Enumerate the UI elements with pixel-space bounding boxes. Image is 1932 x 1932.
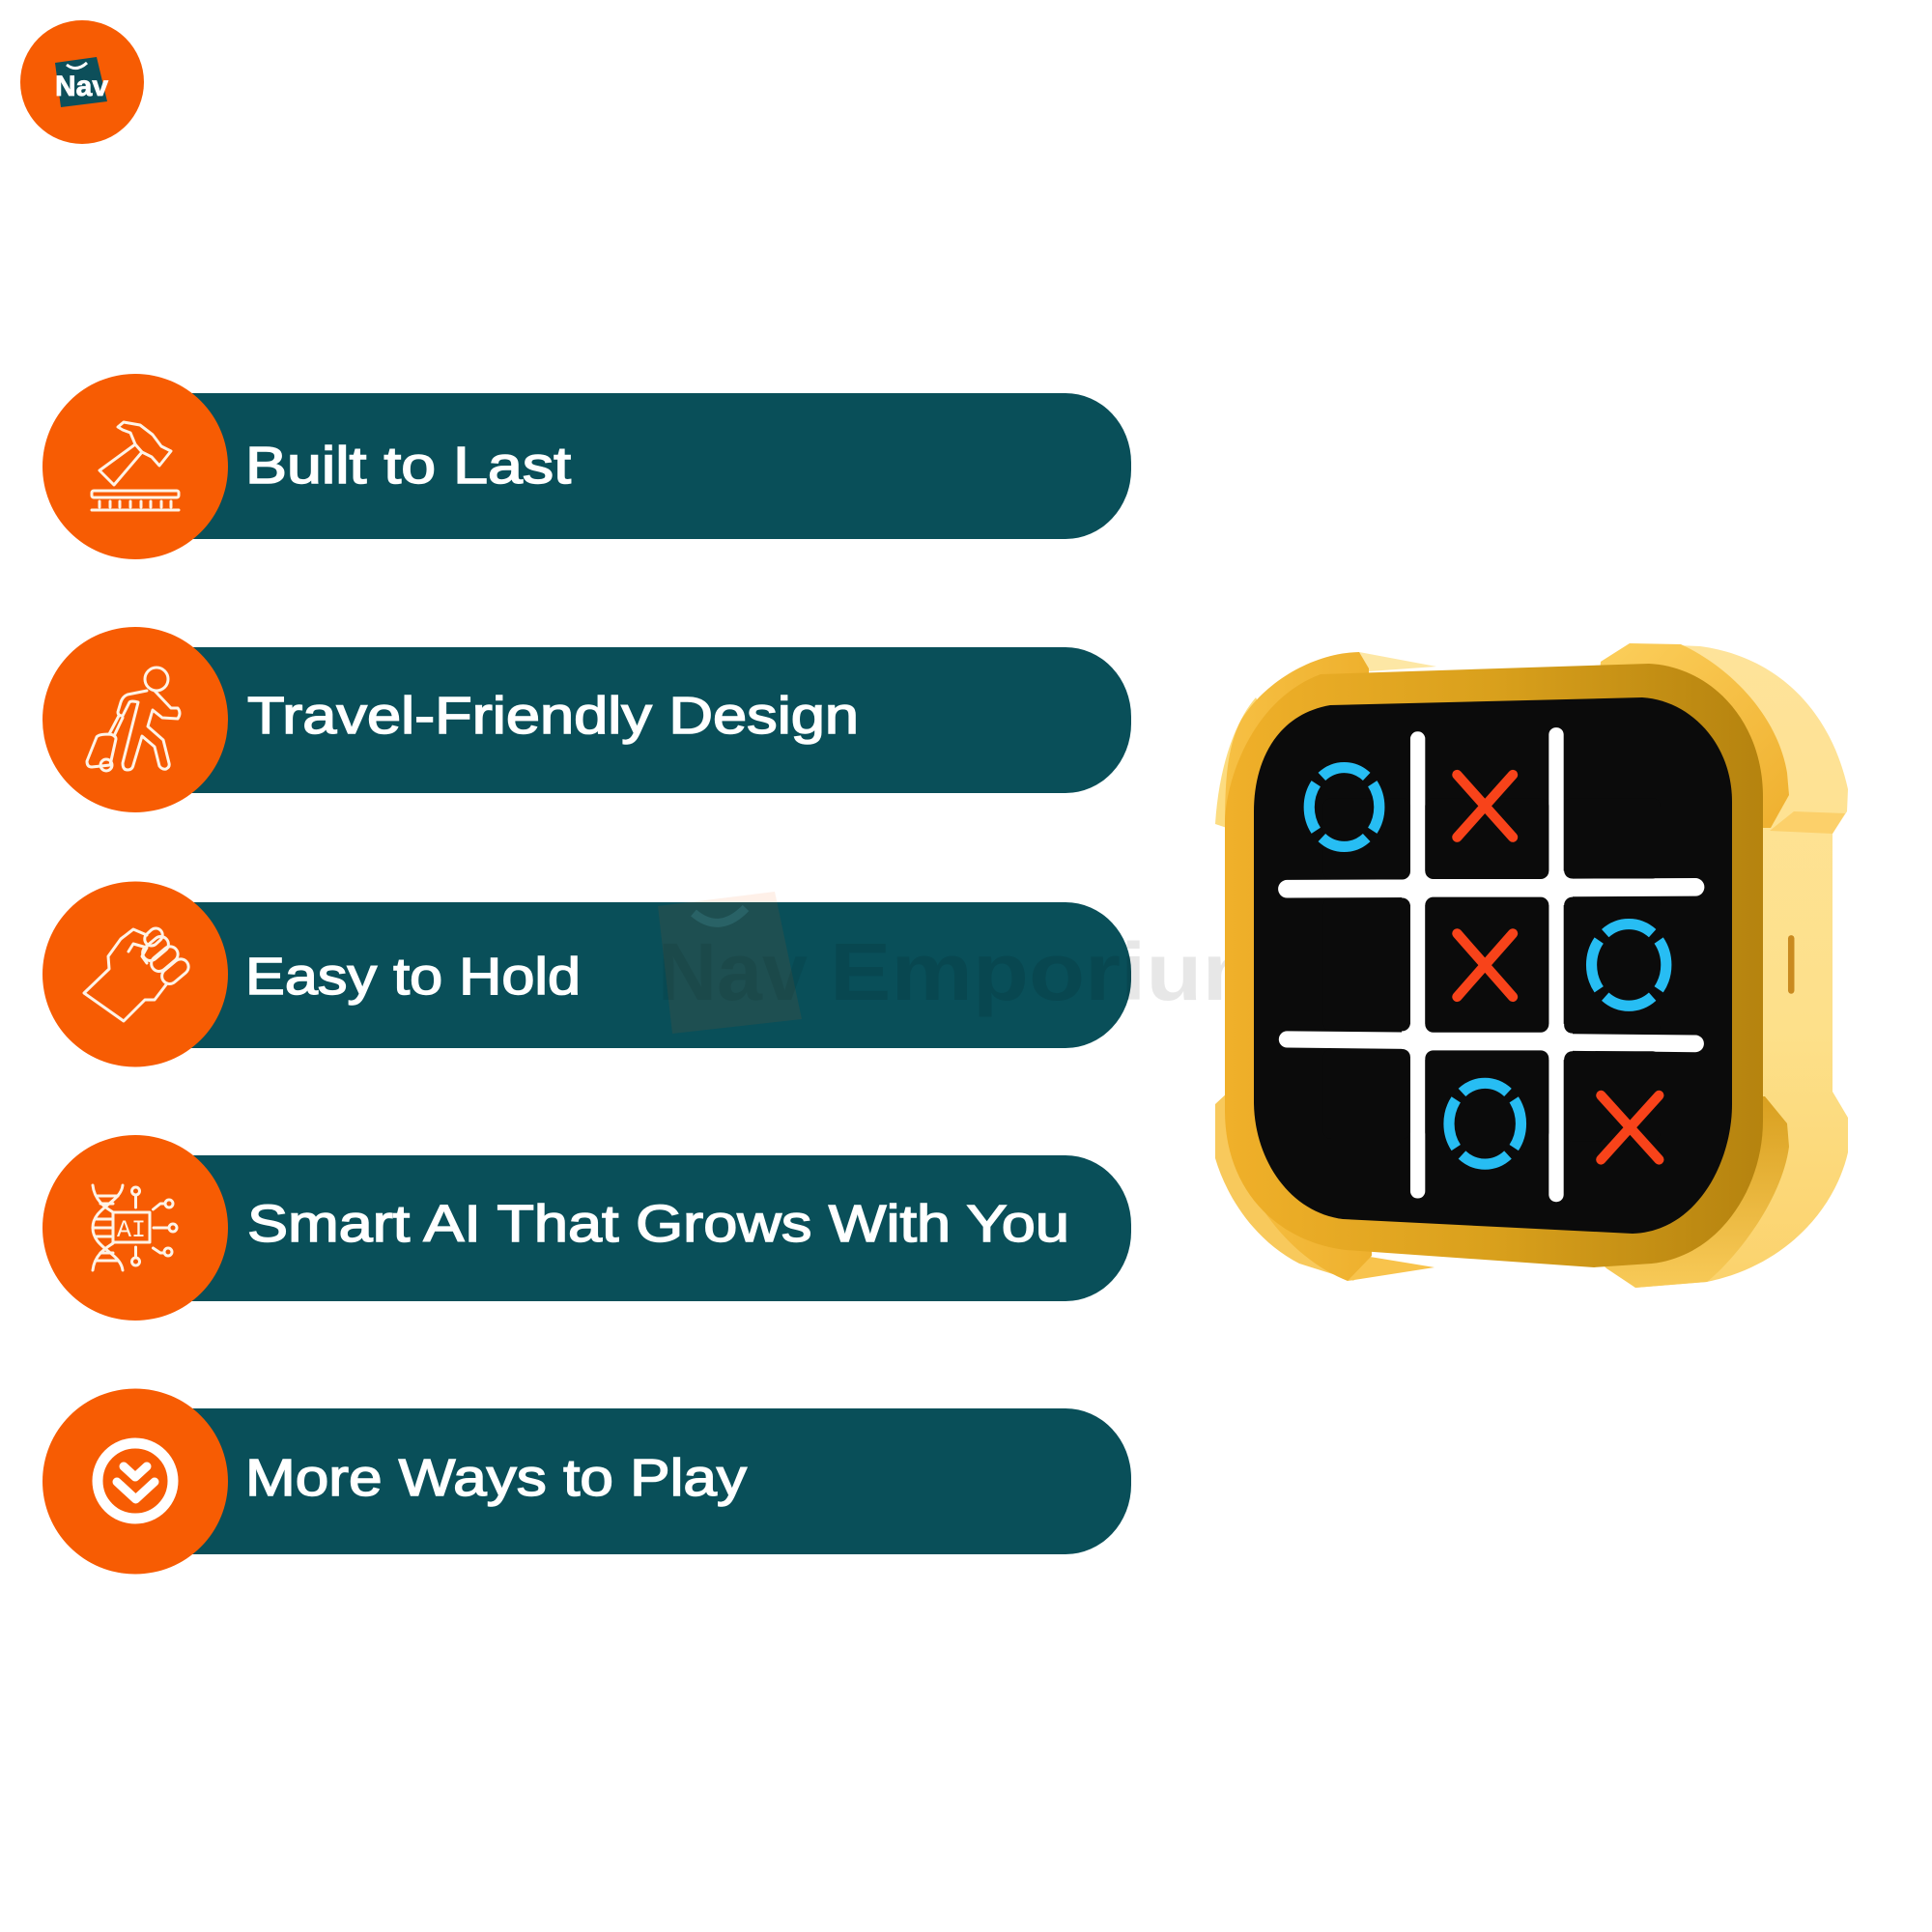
- label: Smart AI That Grows With You: [247, 1195, 1069, 1253]
- feature row: Built to Last: [43, 374, 1131, 559]
- circle: [43, 374, 228, 559]
- circle: [43, 627, 228, 812]
- lower right lobe: [1594, 1096, 1789, 1288]
- top tab: [1359, 652, 1436, 671]
- label: Travel-Friendly Design: [247, 687, 859, 745]
- icon: AI DNA chip: AI: [117, 1216, 146, 1244]
- screen: [1254, 697, 1732, 1234]
- circle: [43, 1135, 228, 1321]
- bar: [97, 393, 1131, 539]
- upper left light edge: [1215, 697, 1275, 828]
- grid cells: [1323, 798, 1661, 1141]
- feature row: Easy to Hold: [43, 881, 1131, 1066]
- icon: traveler with suitcase: [87, 668, 180, 771]
- feature row: Travel-Friendly Design: [43, 627, 1131, 812]
- logo badge: [20, 20, 144, 144]
- bar: [97, 1155, 1131, 1301]
- icon: fist: [84, 925, 191, 1021]
- device back body: [1594, 643, 1848, 1288]
- product: tic-tac-toe device: [1215, 643, 1848, 1288]
- upper right lobe: [1594, 643, 1789, 828]
- slanted shoulder band: [1770, 811, 1845, 834]
- red X marks: [1457, 775, 1659, 1159]
- icon: double chevron circle: [98, 1443, 173, 1519]
- label: Easy to Hold: [245, 948, 581, 1006]
- watermark: Nav: [658, 926, 808, 1017]
- icon: hammer: [92, 422, 179, 510]
- grid lines: [1278, 727, 1704, 1202]
- circle: [43, 881, 228, 1066]
- feature row: Smart AI That Grows With You: [43, 1135, 1131, 1321]
- circle: [43, 1389, 228, 1575]
- left frame: [1225, 652, 1372, 1281]
- bar: [97, 1408, 1131, 1554]
- feature row: More Ways to Play: [43, 1389, 1131, 1575]
- label: More Ways to Play: [245, 1449, 747, 1507]
- watermark: Emporium: [830, 926, 1284, 1017]
- bar: [97, 647, 1131, 793]
- board contents: [1278, 727, 1794, 1202]
- icon: AI DNA chip: [93, 1185, 177, 1270]
- lower left light edge: [1215, 1092, 1354, 1281]
- side port: [1788, 935, 1794, 994]
- watermark: [658, 892, 1284, 1034]
- bezel: [1225, 664, 1763, 1267]
- logo badge: Nav: [55, 71, 108, 102]
- label: Built to Last: [245, 437, 571, 495]
- bar: [97, 902, 1131, 1048]
- blue O marks: [1309, 768, 1666, 1164]
- bottom tab: [1348, 1254, 1435, 1281]
